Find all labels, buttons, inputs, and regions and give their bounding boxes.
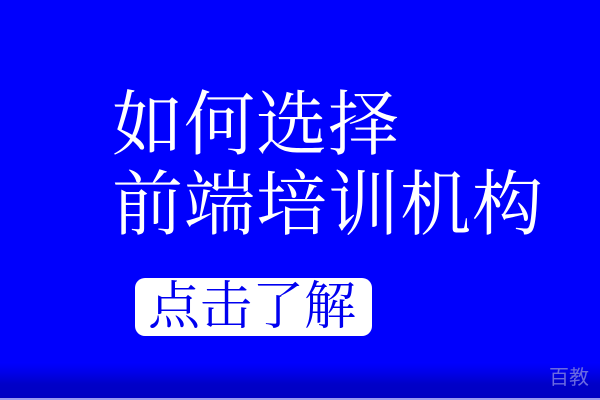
title line 2: 前端培训机构	[112, 167, 544, 245]
button label: 点击了解	[148, 279, 356, 336]
title line 1: 如何选择	[112, 87, 400, 165]
button: learn more	[135, 278, 372, 336]
bottom light edge	[0, 398, 600, 400]
watermark: 百教	[549, 367, 589, 389]
bottom dark band	[0, 362, 600, 398]
